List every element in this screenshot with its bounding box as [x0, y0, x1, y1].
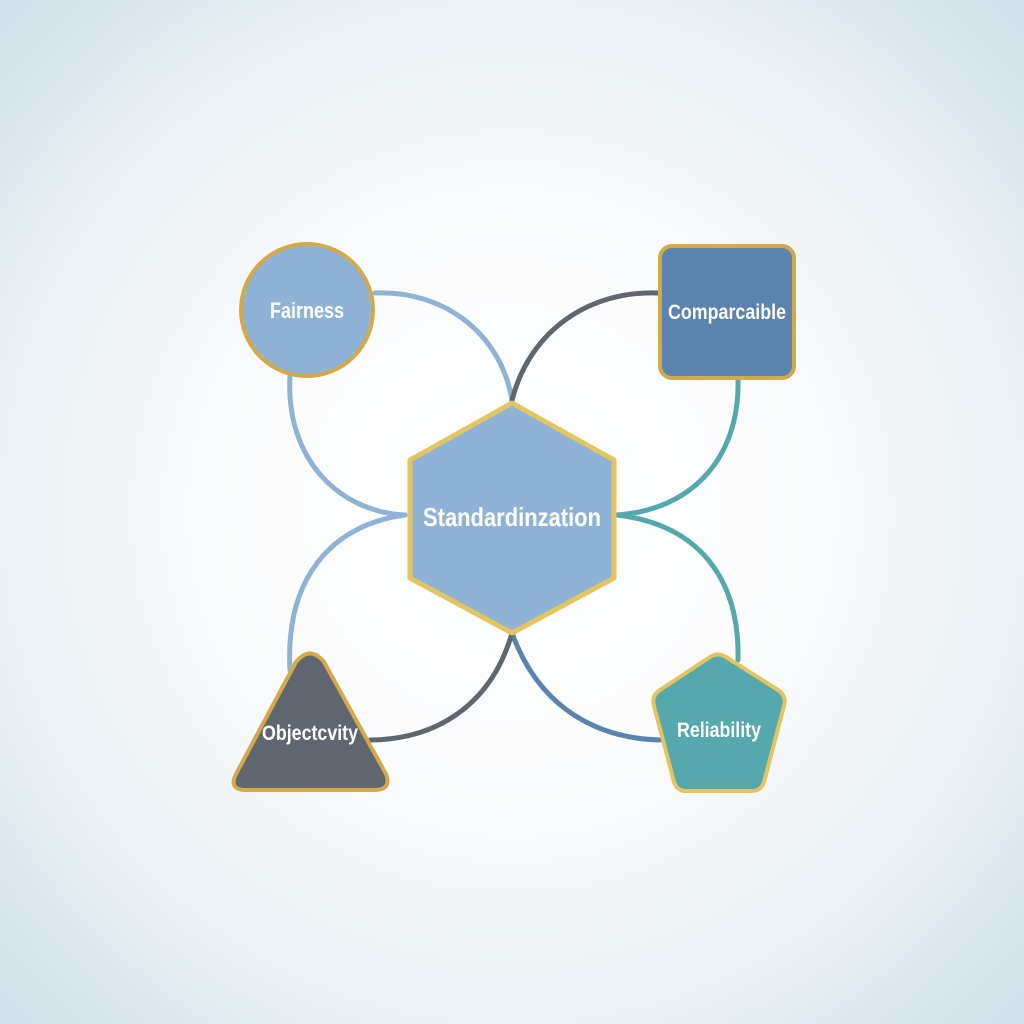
node: Reliability pentagon: [653, 654, 785, 791]
node: Fairness circle: [241, 244, 373, 376]
node: Standardization hexagon: Standardinzation: [423, 502, 601, 532]
connector arcs: [290, 293, 738, 740]
node: Objectivity triangle: Objectcvity: [262, 722, 358, 745]
node: Comparcaible square: Comparcaible: [668, 301, 786, 324]
node: Fairness circle: Fairness: [270, 298, 344, 323]
node: Objectivity triangle: [234, 654, 388, 790]
node: Standardization hexagon: [410, 403, 614, 633]
node: Reliability pentagon: Reliability: [677, 719, 761, 742]
node: Comparcaible square: [660, 246, 794, 378]
